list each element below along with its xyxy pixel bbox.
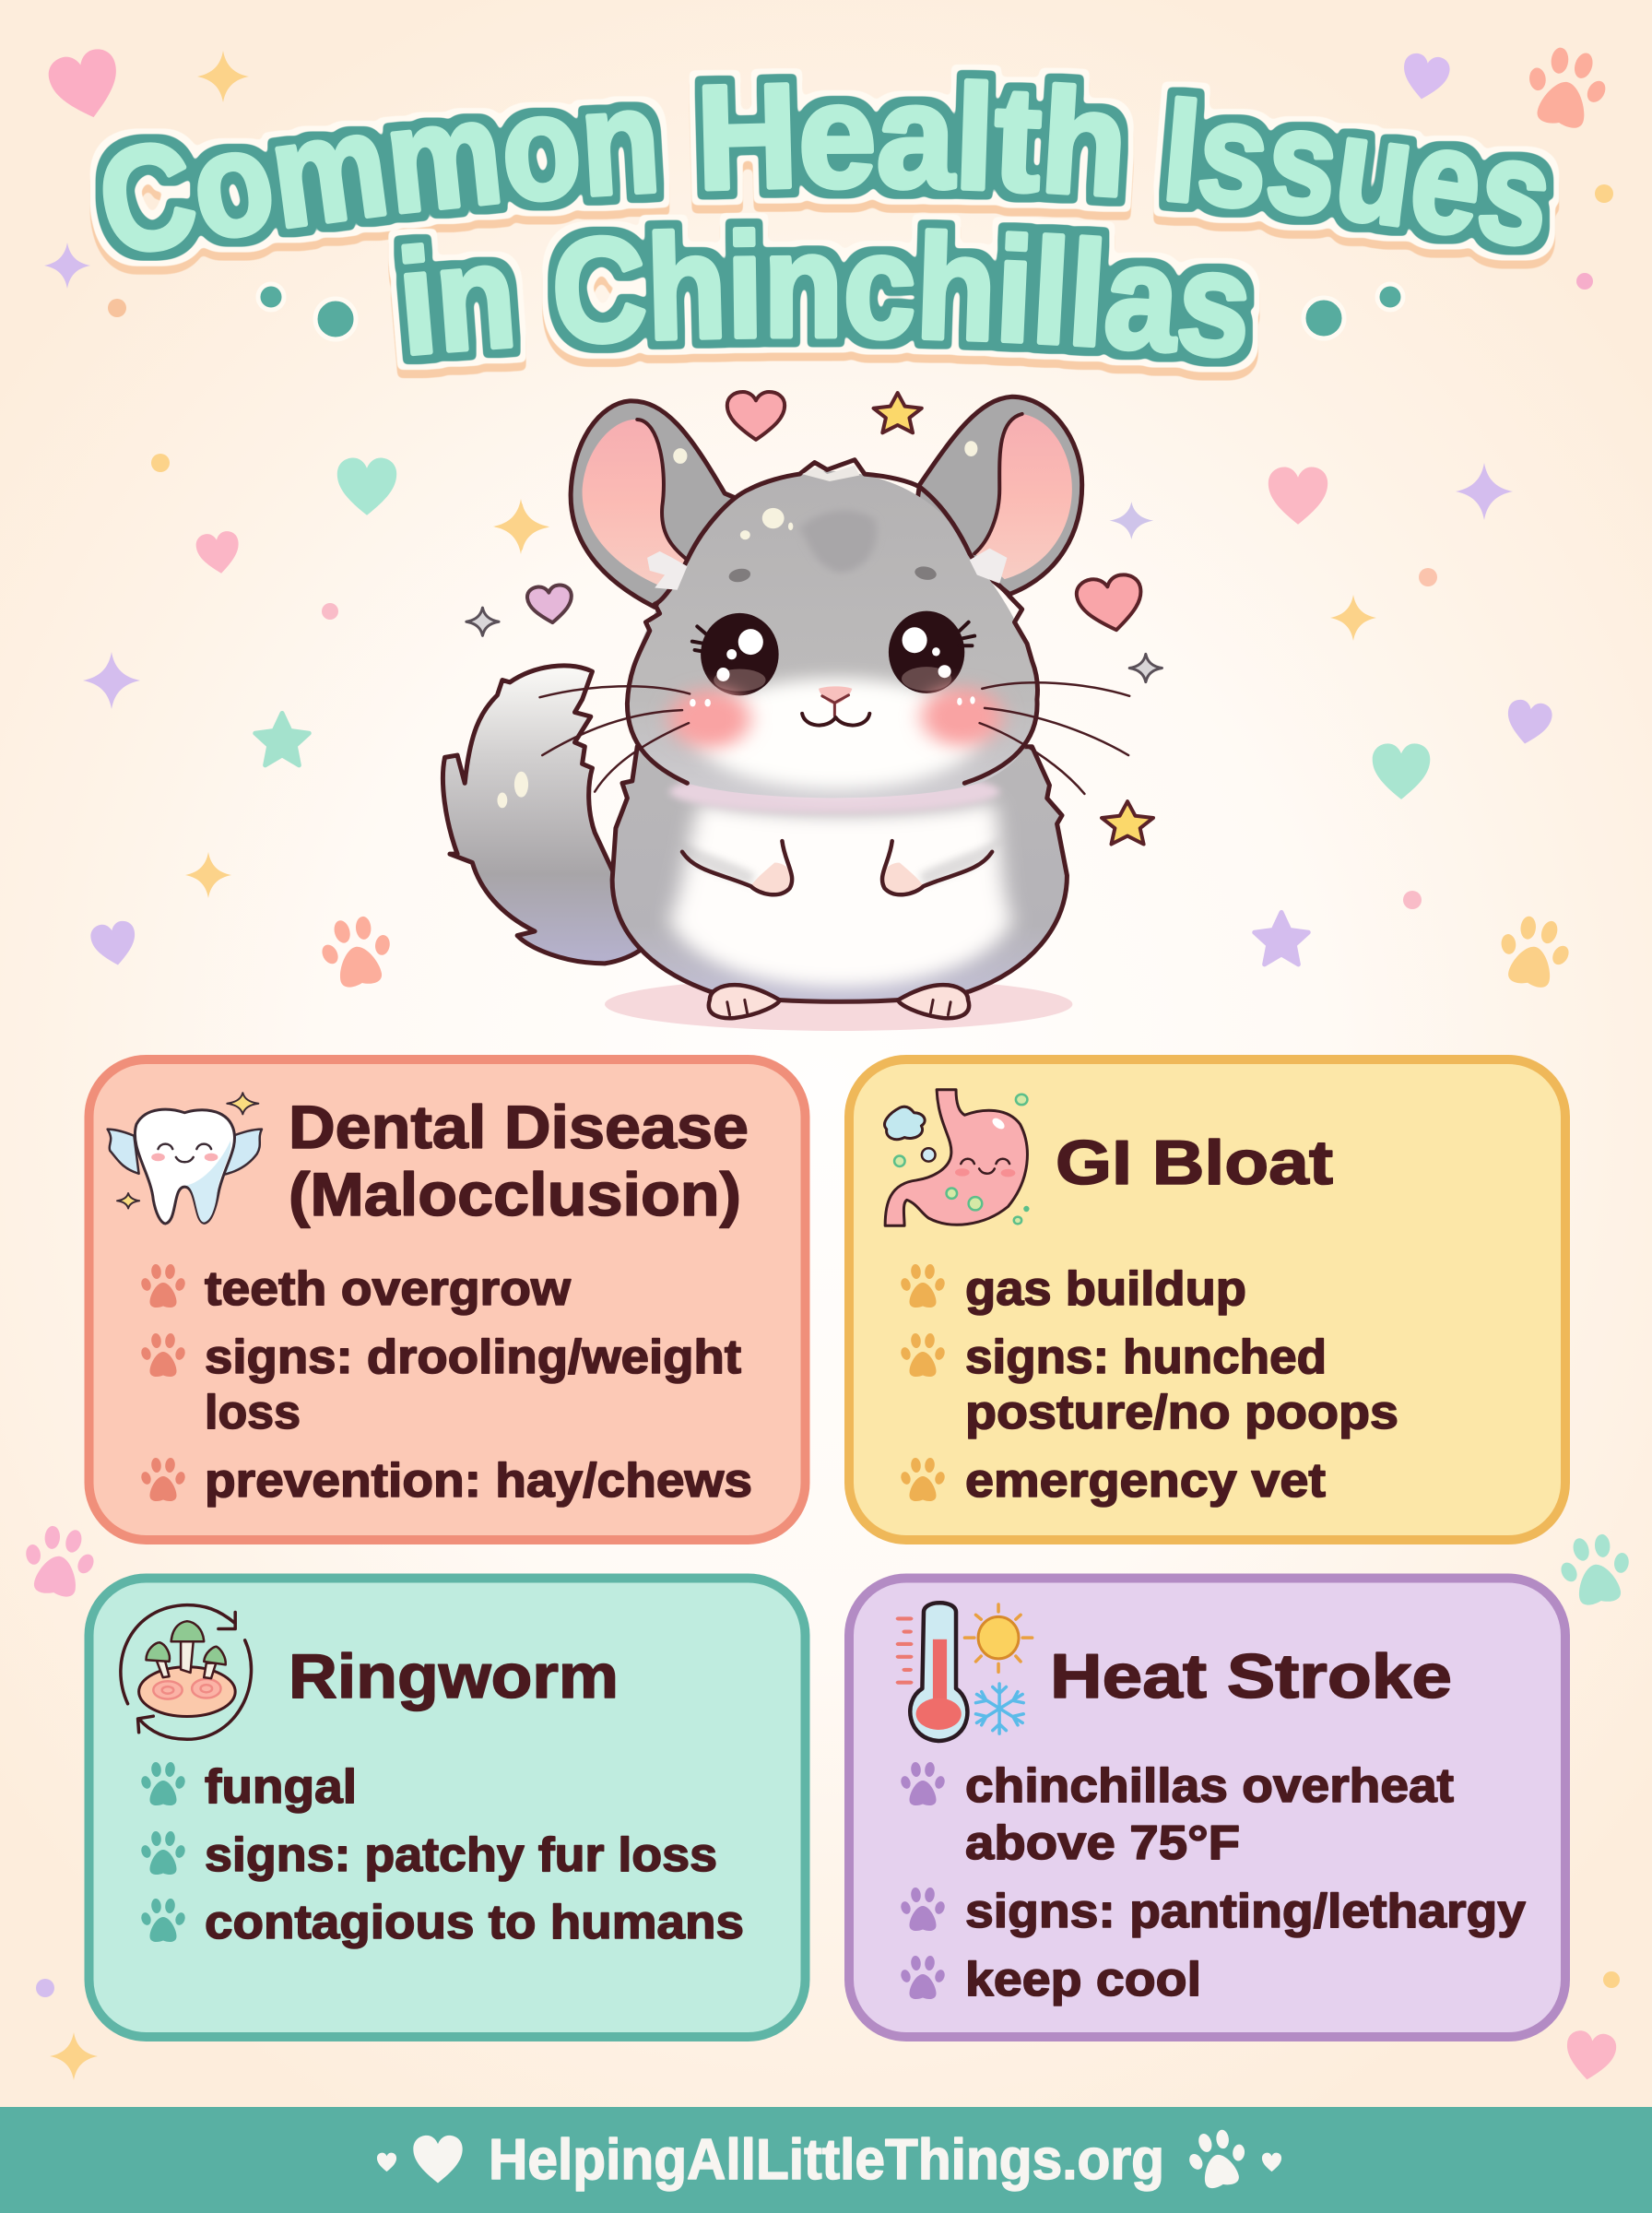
bullet list: loss xyxy=(205,1386,301,1439)
left ear xyxy=(571,401,735,607)
panel: gi bloat xyxy=(849,1059,1565,1540)
panel: ringworm xyxy=(88,1579,806,2037)
head xyxy=(627,460,1038,813)
icon: thermometer, sun and snowflake xyxy=(896,1603,1032,1741)
title dot xyxy=(315,299,356,339)
bullet list xyxy=(900,1262,1398,1508)
icon: yellow sparkle xyxy=(495,503,549,550)
bullet list: emergency vet xyxy=(965,1454,1326,1508)
icon: pink heart bottom right xyxy=(1563,2029,1618,2083)
icon: pink heart top left xyxy=(45,45,126,125)
bullet list: signs: patchy fur loss xyxy=(205,1828,717,1882)
icon: heart above head xyxy=(727,392,785,440)
dot xyxy=(151,454,170,472)
bullet list: chinchillas overheat xyxy=(965,1759,1454,1813)
icon: pink heart xyxy=(1074,573,1148,634)
icon: pink heart xyxy=(195,530,242,576)
title dot xyxy=(258,284,284,310)
left eye xyxy=(692,613,779,695)
bullet list: fungal xyxy=(205,1760,357,1814)
heading: Heat Stroke xyxy=(1050,1641,1452,1711)
icon: small heart xyxy=(377,2153,396,2172)
icon: ringworm fungus xyxy=(121,1605,252,1739)
icon: lilac sparkle xyxy=(44,243,90,289)
bullet list: signs: hunched xyxy=(965,1331,1327,1384)
icon: sparkle xyxy=(1330,595,1376,641)
bullet list xyxy=(140,1760,744,1949)
icon: sparkle xyxy=(50,2032,98,2080)
icon: lilac heart xyxy=(526,584,574,624)
title dot xyxy=(1304,298,1344,338)
dot xyxy=(36,1979,54,1997)
icon: paw xyxy=(18,1521,101,1601)
right foot xyxy=(898,985,969,1018)
chinchilla illustration xyxy=(442,392,1162,1031)
icon: grey sparkle xyxy=(1129,654,1162,682)
nose and mouth xyxy=(802,686,869,726)
whiskers xyxy=(540,682,1129,794)
icon: lilac star xyxy=(1255,912,1308,964)
icon: paw xyxy=(1553,1529,1637,1609)
bullet list: keep cool xyxy=(965,1953,1201,2006)
footer band xyxy=(0,2107,1652,2213)
icon: sparkle xyxy=(185,852,231,898)
icon: mint heart right xyxy=(1373,743,1430,799)
bullet list xyxy=(140,1262,752,1508)
dot xyxy=(1403,891,1422,909)
icon: lilac sparkle xyxy=(1110,502,1153,539)
bullet list: signs: drooling/weight xyxy=(205,1331,741,1384)
panel: dental disease xyxy=(88,1059,806,1540)
icon: peach paw top right xyxy=(1518,41,1615,134)
dot xyxy=(108,299,126,317)
icon: sparkle xyxy=(493,499,549,554)
icon: yellow sparkle xyxy=(197,51,249,102)
dot xyxy=(1595,184,1613,203)
title: Common Health Issues xyxy=(89,65,1560,275)
left foot xyxy=(709,985,780,1018)
heading: (Malocclusion) xyxy=(289,1160,741,1228)
cheeks xyxy=(668,687,1003,748)
icon: small heart xyxy=(1262,2153,1281,2172)
bullet list: signs: panting/lethargy xyxy=(965,1885,1526,1938)
icon: winged tooth xyxy=(108,1093,262,1224)
bullet list: above 75°F xyxy=(965,1817,1240,1870)
title dot xyxy=(1377,284,1403,310)
bullet list xyxy=(900,1759,1526,2006)
icon: large heart xyxy=(413,2136,463,2183)
right ear xyxy=(917,396,1082,594)
icon: grey sparkle xyxy=(466,608,499,635)
panel: heat stroke xyxy=(849,1579,1565,2037)
icon: sparkle xyxy=(1456,463,1513,520)
icon: lilac heart left xyxy=(88,919,140,969)
icon: pink heart right xyxy=(1268,467,1328,525)
dot xyxy=(1419,568,1437,586)
icon: star xyxy=(1102,801,1153,845)
dot xyxy=(1603,1971,1620,1988)
website text: HelpingAllLittleThings.org xyxy=(489,2128,1164,2192)
right arm xyxy=(882,837,1005,895)
right eye xyxy=(889,611,974,693)
icon: stomach xyxy=(885,1090,1030,1225)
dot xyxy=(1576,273,1593,290)
bullet list: contagious to humans xyxy=(205,1896,744,1949)
body xyxy=(612,747,1067,1001)
icon: mint star xyxy=(255,713,309,765)
heading: Ringworm xyxy=(289,1641,619,1711)
left arm xyxy=(669,837,792,895)
bullet list: posture/no poops xyxy=(965,1386,1398,1439)
title line 2: in Chinchillas xyxy=(388,212,1260,381)
bullet list: prevention: hay/chews xyxy=(205,1454,752,1508)
icon: lilac heart right xyxy=(1503,698,1554,748)
dot xyxy=(322,603,338,620)
icon: purple heart top right xyxy=(1398,52,1452,103)
heading xyxy=(289,1093,749,1228)
bullet list: teeth overgrow xyxy=(205,1262,572,1316)
bullet list: gas buildup xyxy=(965,1262,1246,1316)
icon: mint heart xyxy=(337,457,396,515)
icon: sparkle xyxy=(83,652,140,709)
ground shadow xyxy=(605,977,1072,1031)
heading: Dental Disease xyxy=(289,1093,749,1161)
icon: paw xyxy=(1492,910,1577,992)
heading: GI Bloat xyxy=(1056,1128,1333,1198)
tail xyxy=(442,666,643,964)
icon: paw xyxy=(1183,2125,1253,2193)
icon: star above head xyxy=(874,393,922,432)
icon: paw xyxy=(314,911,398,991)
